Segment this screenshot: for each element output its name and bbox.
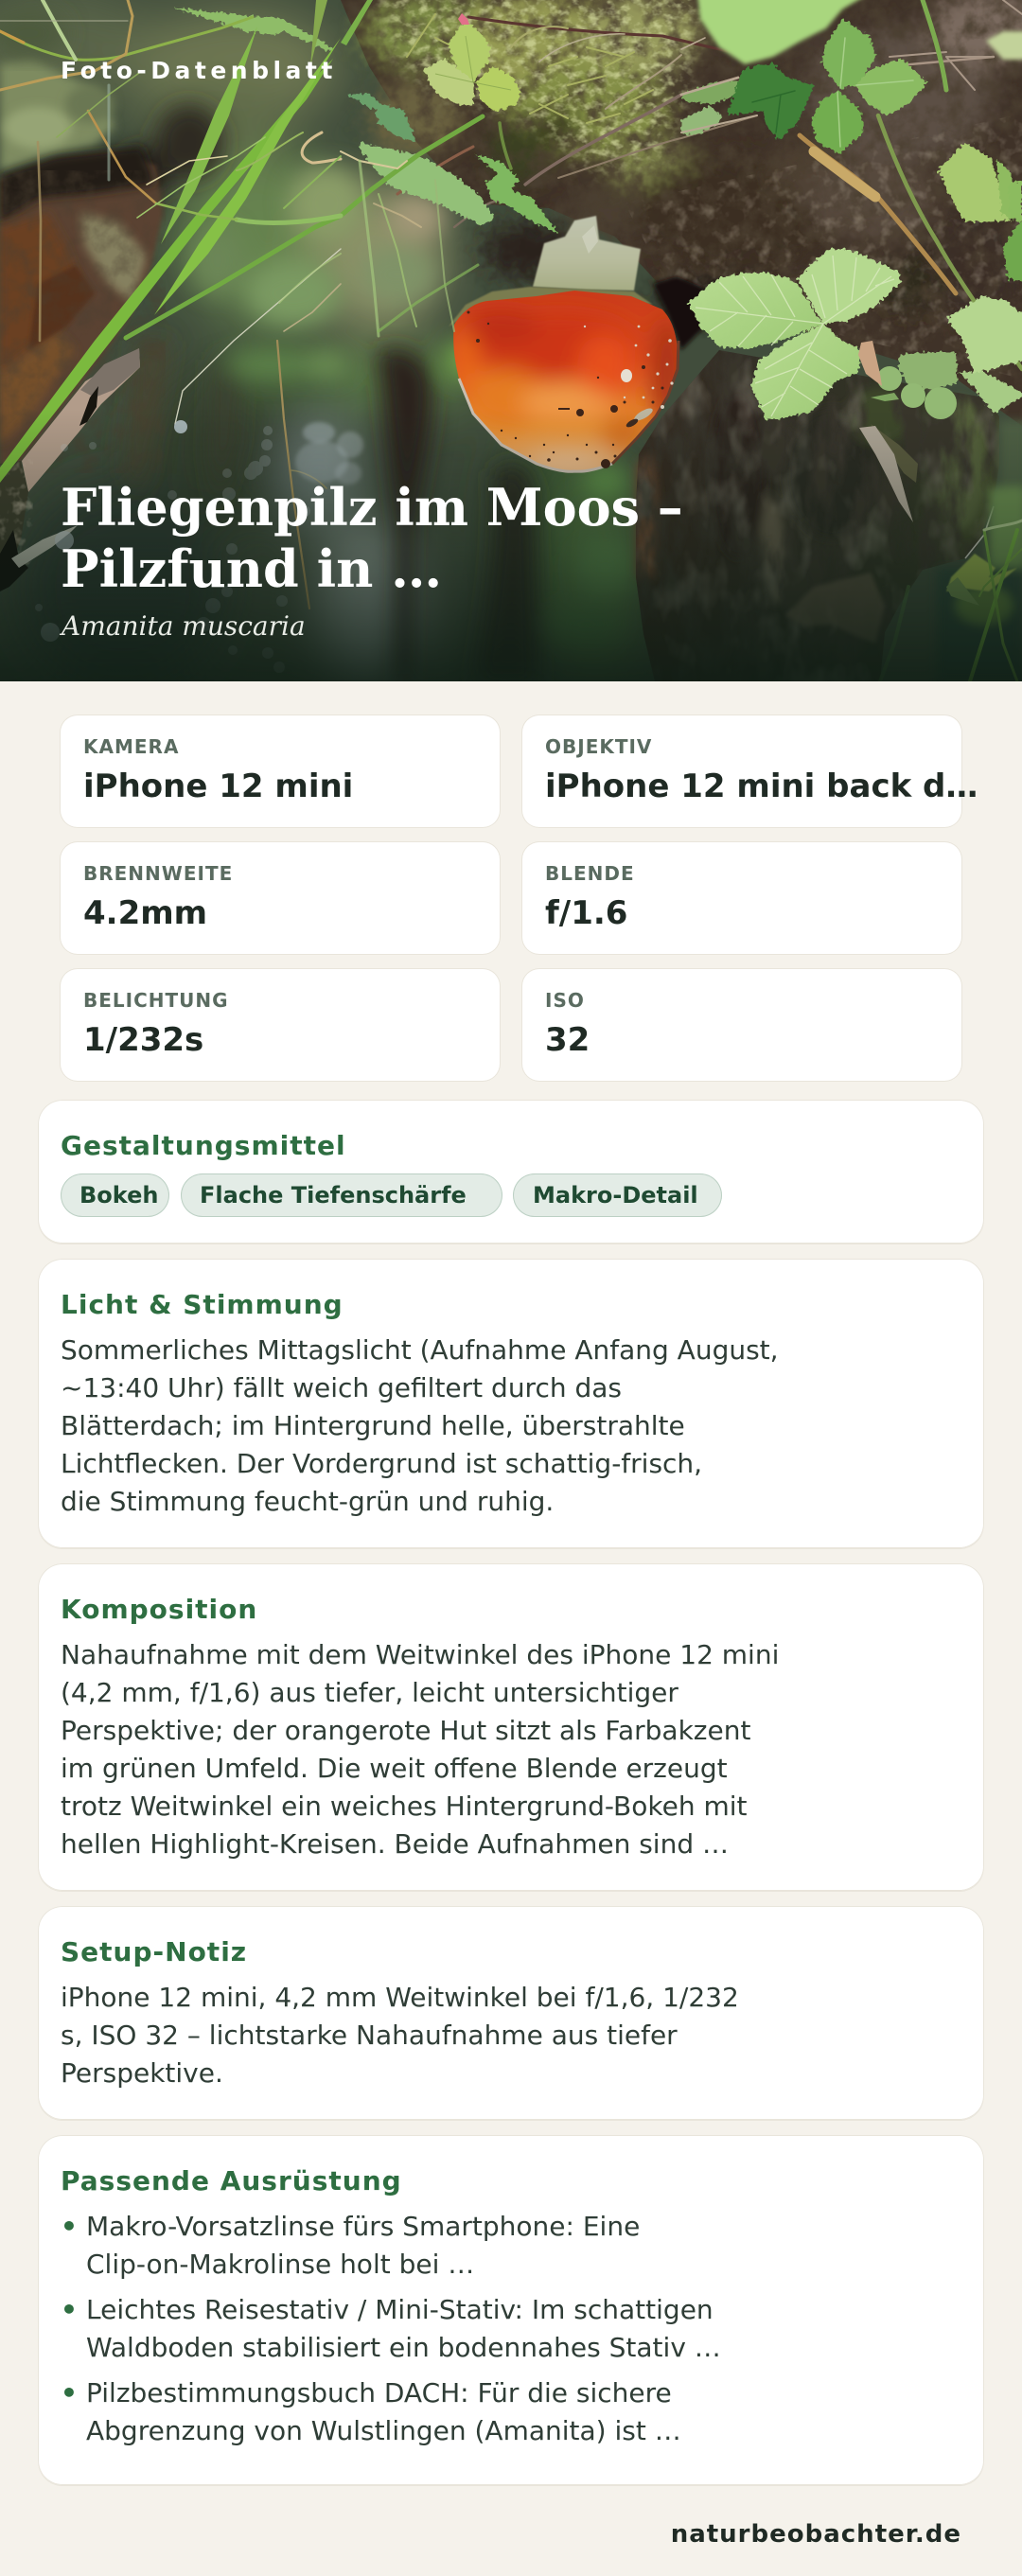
heading: Passende Ausrüstung [61,2165,402,2197]
spec card: Brennweite [61,842,500,954]
tag: Makro-Detail [513,1173,722,1217]
panel: Setup-Notiz [38,1906,984,2120]
hero photo panel [0,0,1022,681]
spec card: Belichtung: BELICHTUNG [83,989,229,1012]
title: Pilzfund in … [61,538,442,599]
mossy rock upper left [0,9,115,172]
heading: Licht & Stimmung [61,1289,344,1320]
list item: Pilzbestimmungsbuch [61,2377,681,2446]
tag: Flache Tiefenschärfe: Flache Tiefenschärfe [200,1182,467,1209]
mushroom cap [445,284,691,478]
title [61,477,683,599]
spec card: Objektiv: iPhone 12 mini back d… [545,768,978,805]
body text: Sommerliches Mittagslicht (Aufnahme Anfang August, [61,1334,779,1366]
photo: mushroom on tree stump [0,0,1022,681]
list item: Reisestativ: • [61,2294,78,2325]
list item: Makro-Vorsatzlinse: Clip-on-Makrolinse holt bei … [86,2249,474,2280]
heading: Gestaltungsmittel [61,1130,346,1161]
spec card: Belichtung: 1/232s [83,1021,203,1059]
list item: Reisestativ: Waldboden stabilisiert ein bodennahes Stativ … [86,2332,721,2363]
dark gradient overlay [0,0,1022,681]
blurred forest background [0,0,1022,691]
list item: Reisestativ [61,2294,721,2363]
tag: Flache Tiefenschärfe [181,1173,502,1217]
small leaves centre top [173,8,558,234]
panel: Gestaltungsmittel [38,1100,984,1244]
body text: ~13:40 Uhr) fällt weich gefiltert durch das [61,1372,622,1403]
body text: Blätterdach; im Hintergrund helle, überstrahlte [61,1410,685,1441]
body text: (4,2 mm, f/1,6) aus tiefer, leicht untersichtiger [61,1677,678,1708]
tree trunk [636,350,999,681]
spec card: ISO [522,969,961,1081]
footer: source: naturbeobachter.de [671,2520,961,2549]
body text: Perspektive; der orangerote Hut sitzt als Farbakzent [61,1715,750,1746]
spec card: Belichtung [61,969,500,1081]
body text: trotz Weitwinkel ein weiches Hintergrund-Bokeh mit [61,1791,748,1822]
moss strands and twigs [397,0,1022,227]
body text: die Stimmung feucht-grün und ruhig. [61,1486,554,1517]
scientific name: Amanita muscaria [62,610,306,642]
tag: Bokeh: Bokeh [79,1182,158,1209]
spec card: Blende: f/1.6 [545,894,627,932]
soil and moss clump [341,0,1022,426]
bokeh highlights [35,420,363,673]
body text: im grünen Umfeld. Die weit offene Blende erzeugt [61,1753,728,1784]
list item: Pilzbestimmungsbuch: Pilzbestimmungsbuch DACH: Für die sichere [86,2377,672,2408]
list item: Makro-Vorsatzlinse: • [61,2211,78,2242]
body text: Nahaufnahme mit dem Weitwinkel des iPhone 12 mini [61,1639,779,1670]
body text: iPhone 12 mini, 4,2 mm Weitwinkel bei f/1,6, 1/232 [61,1982,739,2013]
body text: s, ISO 32 – lichtstarke Nahaufnahme aus tiefer [61,2020,678,2051]
panel: Komposition [38,1563,984,1891]
panel: Passende Ausrüstung [38,2135,984,2485]
tag: Bokeh [61,1173,169,1217]
spec card: Kamera: iPhone 12 mini [83,768,353,805]
list item: Pilzbestimmungsbuch: • [61,2377,78,2408]
body text: Lichtflecken. Der Vordergrund ist schattig-frisch, [61,1448,702,1479]
fallen log left [0,147,166,591]
mushroom stem [533,216,641,291]
list item: Makro-Vorsatzlinse: Makro-Vorsatzlinse fürs Smartphone: Eine [86,2211,640,2242]
body text [61,1982,739,2089]
spec card: Brennweite: 4.2mm [83,894,207,932]
body text [61,1639,779,1860]
spec card: Kamera [61,715,500,827]
list item: Pilzbestimmungsbuch: Abgrenzung von Wulstlingen (Amanita) ist … [86,2415,681,2446]
panel: Licht & Stimmung [38,1259,984,1548]
title: Fliegenpilz im Moos – [61,477,683,538]
large strawberry leaf [688,249,1022,419]
body text: Perspektive. [61,2057,223,2089]
heading: Komposition [61,1594,257,1625]
spec card: Kamera: KAMERA [83,735,179,758]
heading: Setup-Notiz [61,1936,247,1967]
spec card: Blende [522,842,961,954]
spec card: ISO: 32 [545,1021,590,1059]
tag: Makro-Detail: Makro-Detail [533,1182,698,1209]
spec card: Objektiv: OBJEKTIV [545,735,652,758]
green foliage right of trunk [880,421,1022,681]
spec card: Blende: BLENDE [545,862,635,885]
spec card: Objektiv [522,715,961,827]
body text [61,1334,779,1517]
list item: Makro-Vorsatzlinse [61,2211,640,2280]
spec card: ISO: ISO [545,989,585,1012]
strawberry leaves upper right [681,0,1022,369]
grass blades [0,0,483,609]
body text: hellen Highlight-Kreisen. Beide Aufnahmen sind … [61,1828,729,1860]
list item: Reisestativ: Leichtes Reisestativ / Mini-Stativ: Im schattigen [86,2294,714,2325]
spec card: Brennweite: BRENNWEITE [83,862,233,885]
kicker: Foto-Datenblatt [61,57,337,84]
